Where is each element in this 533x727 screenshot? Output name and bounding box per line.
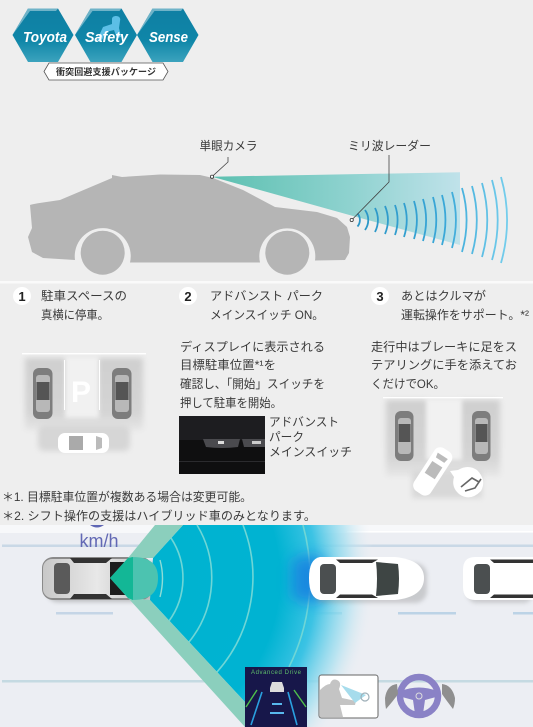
hexagon: Sense (137, 8, 198, 62)
ribbon: package label: 衝突回避支援パッケージ (56, 66, 156, 77)
step 2 panel (179, 287, 352, 474)
callout: foot and hand icon (450, 467, 483, 497)
switch caption (269, 415, 352, 459)
car silhouette (28, 174, 350, 262)
footnotes: ＊2. シフト操作の支援はハイブリッド車のみとなります。 (2, 508, 316, 523)
step 2 number: 2 (184, 289, 192, 304)
step 1 heading (41, 288, 127, 322)
leader line: camera (210, 157, 228, 178)
camera beam (212, 172, 460, 245)
background: top section (0, 0, 533, 525)
step 3 number: 3 (376, 289, 384, 304)
wheel: front (265, 231, 309, 275)
step 1 panel (13, 287, 146, 453)
step 2 body text: ディスプレイに表示される (180, 339, 325, 354)
teal hood wedge (110, 557, 162, 600)
icon: driver monitoring (319, 675, 378, 718)
step 3 body text: 走行中はブレーキに足をス (371, 339, 517, 354)
parked car right (112, 368, 132, 419)
silver car (42, 557, 164, 602)
step 2 body text: 目標駐車位置*¹を (180, 357, 276, 372)
switch caption: アドバンスト (269, 415, 339, 429)
panel: advanced drive display: Advanced Drive (251, 670, 302, 676)
front car glow (292, 556, 326, 602)
step 1 heading: 駐車スペースの (41, 288, 127, 303)
step 3 body text: くだけでOK。 (371, 377, 445, 391)
parking illustration 3 (383, 397, 503, 498)
panel: advanced drive display (245, 667, 307, 727)
divider band (0, 281, 533, 284)
sensor fan: range arcs (169, 525, 310, 672)
parked car left (395, 411, 414, 461)
step 3 body text (371, 339, 517, 391)
hexagon: Toyota: Toyota (23, 29, 67, 46)
step 3 heading: 運転操作をサポート。*² (401, 307, 529, 322)
white car: middle (309, 557, 427, 603)
step 1 heading: 真横に停車。 (41, 308, 109, 322)
switch photo (179, 416, 265, 474)
sensor fan: upper teal band (128, 525, 183, 558)
own car white (58, 433, 109, 453)
switch caption: パーク (269, 430, 304, 444)
label: camera: 単眼カメラ (200, 139, 258, 153)
footnotes: ＊1. 目標駐車位置が複数ある場合は変更可能。 (2, 489, 252, 504)
step 2 body text: 確認し、「開始」スイッチを (180, 376, 325, 391)
road background (0, 525, 533, 727)
step 3 heading (401, 288, 529, 322)
parked car left (33, 368, 52, 419)
icon: steering wheel with hands (385, 677, 455, 715)
hexagon: Safety: Safety (85, 29, 129, 46)
speed unit fragment: km/h (80, 531, 119, 551)
wheel: rear (81, 231, 125, 275)
step 2 heading (210, 289, 324, 322)
road lane lines (2, 544, 533, 682)
label: radar: ミリ波レーダー (348, 138, 431, 153)
step 1 number (13, 287, 31, 305)
step 3 body text: テアリングに手を添えてお (371, 358, 517, 372)
step 3 number (371, 287, 389, 305)
bottom panel: road scene (0, 525, 533, 727)
diagram: car with sensors (28, 138, 507, 275)
switch caption: メインスイッチ (269, 445, 352, 459)
hexagon: Toyota (12, 8, 74, 62)
radar arcs (358, 177, 507, 263)
white car: right (463, 557, 533, 603)
parking illustration 1 (22, 353, 146, 453)
footnotes (2, 489, 316, 523)
road top band (0, 525, 533, 533)
step 2 heading: メインスイッチ ON。 (210, 308, 324, 322)
step 2 body text (180, 339, 325, 410)
sensor fan: lower teal band (110, 578, 245, 727)
parking P mark: P (71, 376, 91, 409)
leader line: radar (350, 155, 389, 222)
step 3 panel (371, 287, 529, 498)
parked car right (472, 411, 490, 461)
step 3 heading: あとはクルマが (401, 288, 486, 303)
sensor fan: blue area (150, 525, 533, 727)
step 2 heading: アドバンスト パーク (210, 289, 323, 303)
ribbon: package label (44, 63, 168, 80)
step 1 number: 1 (18, 289, 26, 304)
step 2 body text: 押して駐車を開始。 (180, 395, 282, 410)
hexagon: Sense: Sense (149, 29, 188, 46)
hexagon: Safety (75, 8, 137, 62)
own car turning (410, 445, 455, 498)
logo: Toyota Safety Sense (12, 8, 198, 80)
step 2 number (179, 287, 197, 305)
